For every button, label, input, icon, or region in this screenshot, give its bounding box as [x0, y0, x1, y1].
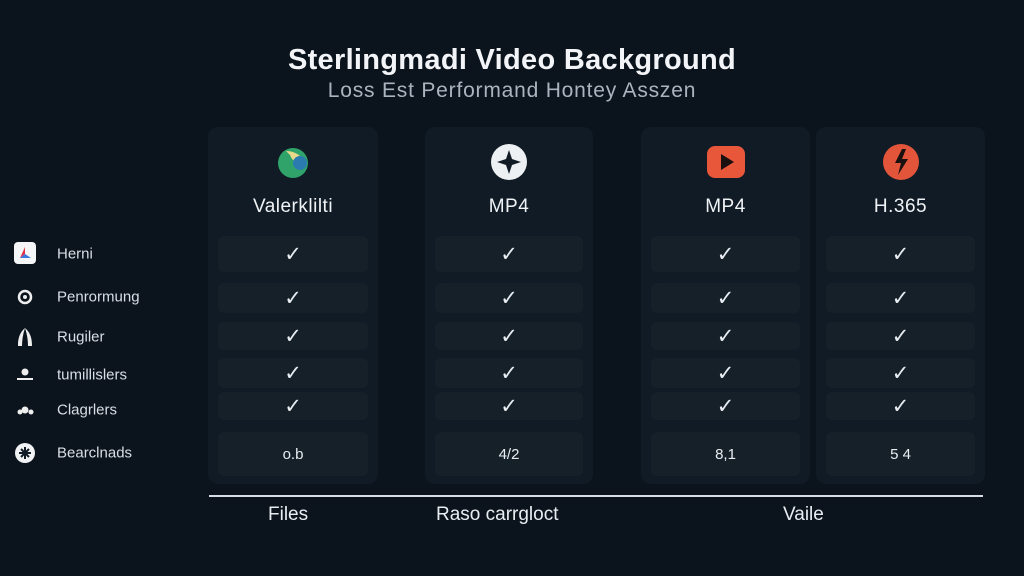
panel: H.365: ✓ — [892, 394, 909, 418]
row labels — [14, 242, 140, 463]
icon: globe — [278, 148, 308, 178]
icon: play — [707, 146, 745, 178]
panel: H.365: ✓ — [892, 242, 909, 266]
icon: flame — [883, 144, 919, 180]
heading: H.365 — [874, 196, 927, 217]
panel: MP4 (1): ✓ — [500, 394, 518, 418]
label: Rugiler — [18, 328, 105, 346]
heading: MP4 — [705, 196, 746, 217]
panel: MP4 (2) — [641, 127, 810, 484]
panel: Valerklilti — [208, 127, 378, 484]
panel: MP4 (1): ✓ — [500, 242, 518, 266]
panel: MP4 (2): ✓ — [717, 324, 734, 348]
panel: MP4 (2): 8,1 — [715, 446, 736, 462]
label: tumillislers: tumillislers — [57, 366, 127, 384]
panel: H.365: 5 4 — [890, 446, 911, 462]
panel: MP4 (1): 4/2 — [499, 446, 519, 462]
label: tumillislers — [17, 366, 127, 384]
panel: Valerklilti: ✓ — [284, 242, 302, 266]
label: Clagrlers: Clagrlers — [57, 402, 117, 418]
label: Rugiler: Rugiler — [57, 328, 105, 346]
panel: MP4 (2): ✓ — [717, 242, 734, 266]
subtitle: Loss Est Performand Hontey Asszen — [328, 79, 696, 102]
panel: Valerklilti: ✓ — [284, 286, 302, 310]
label: Bearclnads — [15, 443, 132, 463]
panel: Valerklilti: ✓ — [284, 394, 302, 418]
panel: H.365 — [816, 127, 985, 484]
panel: MP4 (1) — [425, 127, 593, 484]
panel: H.365: ✓ — [892, 324, 909, 348]
heading: MP4 — [489, 196, 529, 217]
panel: MP4 (1): ✓ — [500, 324, 518, 348]
panel: MP4 (2): ✓ — [717, 362, 734, 384]
label: Herni — [14, 242, 93, 264]
panel: H.365: ✓ — [892, 362, 909, 384]
panel: Valerklilti: ✓ — [284, 362, 302, 384]
footer: Vaile: Vaile — [783, 504, 824, 525]
label: Herni: Herni — [57, 246, 93, 262]
footer: Raso carrgloct: Raso carrgloct — [436, 504, 558, 525]
panel: MP4 (2): ✓ — [717, 286, 734, 310]
panel: Valerklilti: o.b — [283, 446, 303, 462]
label: Penrormung — [18, 288, 140, 306]
icon: compass — [491, 144, 527, 180]
heading: Valerklilti — [253, 196, 333, 217]
panel: H.365: ✓ — [892, 286, 909, 310]
panel: Valerklilti: ✓ — [284, 324, 302, 348]
footer: Files: Files — [268, 504, 308, 525]
panel: MP4 (2): ✓ — [717, 394, 734, 418]
label: Bearclnads: Bearclnads — [57, 444, 132, 462]
panel: MP4 (1): ✓ — [500, 286, 518, 310]
label: Clagrlers — [18, 402, 117, 418]
title: Sterlingmadi Video Background — [288, 44, 736, 76]
label: Penrormung: Penrormung — [57, 288, 140, 306]
panel: MP4 (1): ✓ — [500, 362, 518, 384]
